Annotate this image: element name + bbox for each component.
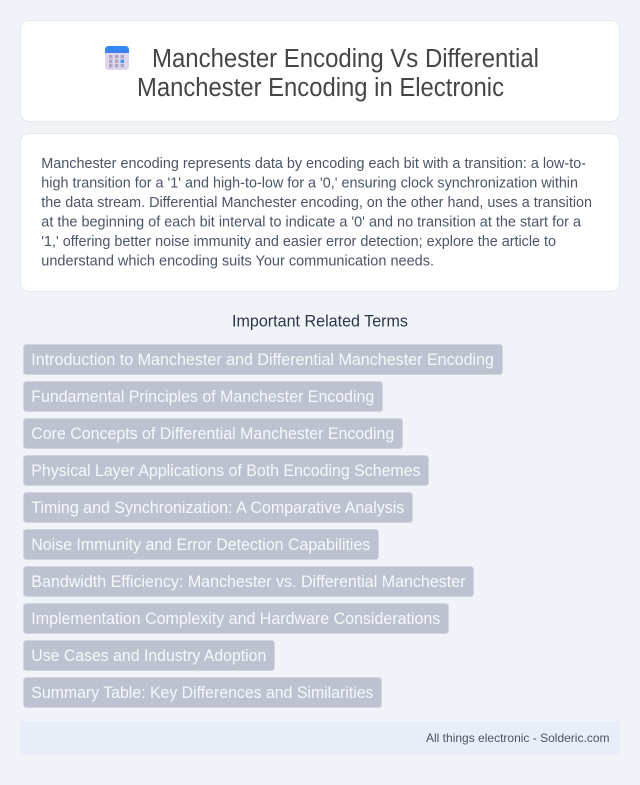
term button 5	[24, 492, 412, 522]
term button 8	[24, 604, 448, 634]
term button 10	[24, 678, 382, 708]
term button 9	[24, 640, 274, 670]
text block: summary: high transition for a '1' and high-to-low for a '0,' ensuring clock synchronization within	[41, 176, 578, 192]
footer	[20, 721, 620, 755]
panel: summary paragraph	[20, 134, 620, 292]
term button 6	[24, 530, 378, 560]
term button 9: Use Cases and Industry Adoption	[31, 647, 266, 665]
icon: calendar	[105, 46, 129, 70]
text block: summary: '1,' offering better noise immunity and easier error detection; explore the article to	[41, 234, 556, 250]
term button 2: Fundamental Principles of Manchester Encoding	[31, 388, 374, 406]
term button 4: Physical Layer Applications of Both Encoding Schemes	[31, 462, 421, 480]
term button 5: Timing and Synchronization: A Comparative Analysis	[31, 499, 404, 517]
term button 8: Implementation Complexity and Hardware Considerations	[31, 610, 440, 628]
title	[137, 45, 539, 102]
term button 10: Summary Table: Key Differences and Similarities	[31, 684, 374, 702]
text block: summary: at the beginning of each bit interval to indicate a '0' and no transition at the start for a	[41, 214, 582, 230]
text block: summary: the data stream. Differential Manchester encoding, on the other hand, uses a transition	[41, 195, 592, 211]
term button 4	[24, 456, 428, 486]
text block: summary: Manchester encoding represents data by encoding each bit with a transition: a low-to-	[41, 156, 586, 172]
term button 6: Noise Immunity and Error Detection Capabilities	[31, 536, 370, 554]
term list	[24, 344, 502, 708]
term button 1	[24, 344, 502, 374]
footer: All things electronic - Solderic.com	[426, 731, 610, 745]
text block: summary	[41, 156, 592, 270]
text block: summary: understand which encoding suits Your communication needs.	[41, 254, 434, 270]
term button 7	[24, 566, 474, 596]
term button 2	[24, 382, 382, 412]
term button 1: Introduction to Manchester and Differential Manchester Encoding	[31, 351, 494, 369]
title: Manchester Encoding in Electronic	[137, 74, 504, 102]
title: Manchester Encoding Vs Differential	[152, 45, 539, 73]
term button 3: Core Concepts of Differential Manchester Encoding	[31, 425, 394, 443]
term button 3	[24, 418, 402, 448]
term button 7: Bandwidth Efficiency: Manchester vs. Differential Manchester	[31, 573, 466, 591]
panel: title card	[20, 20, 620, 122]
heading: related terms: Important Related Terms	[232, 312, 408, 330]
